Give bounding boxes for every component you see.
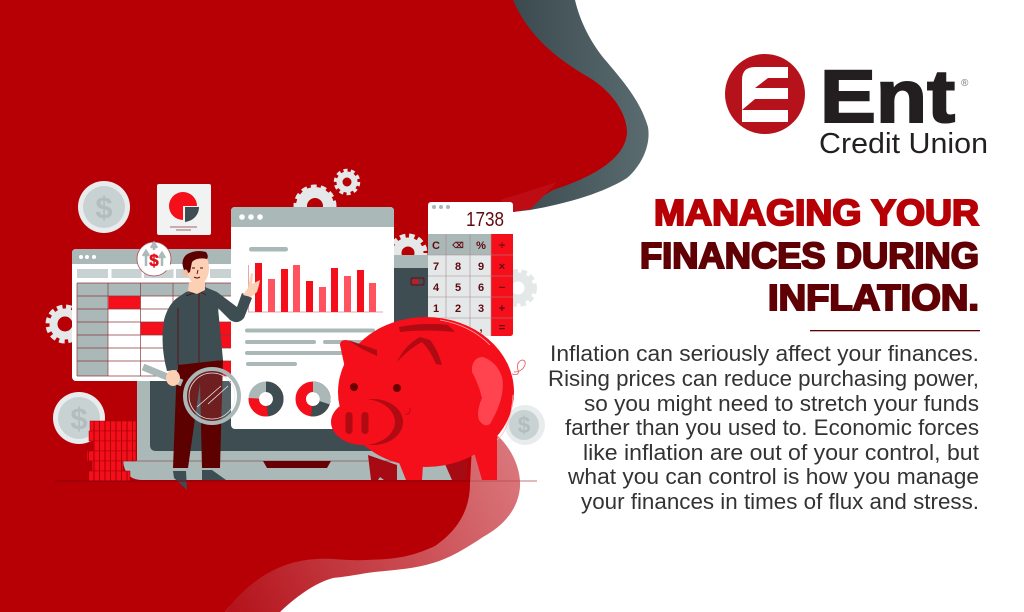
spreadsheet window xyxy=(72,249,242,381)
gear: top large xyxy=(296,187,334,225)
coin: lower left xyxy=(53,392,105,444)
pie chart card xyxy=(157,184,211,235)
body text: Inflation can seriously affect your finances. xyxy=(550,341,979,366)
gear: left xyxy=(48,307,82,341)
calculator: C xyxy=(432,240,440,252)
man with magnifying glass xyxy=(143,251,260,490)
coin: right of pig: $ xyxy=(518,412,531,438)
lighter red wedge xyxy=(500,182,557,212)
gear: behind calculator xyxy=(391,236,425,270)
pointing hand xyxy=(243,273,260,297)
title: MANAGING YOUR xyxy=(654,192,979,233)
calculator: 1738 xyxy=(466,209,504,231)
calculator: = xyxy=(499,322,505,334)
dark grey background swoosh xyxy=(513,0,649,212)
body text xyxy=(548,341,979,514)
calculator: 1 xyxy=(433,303,439,315)
donut chart two xyxy=(301,387,325,411)
body text: like inflation are out of your control, but xyxy=(583,440,979,465)
coin slot xyxy=(399,324,455,332)
bar chart xyxy=(248,263,383,312)
near legs xyxy=(398,460,423,480)
donut chart one xyxy=(254,387,278,411)
neck and head xyxy=(188,282,205,294)
ground line xyxy=(55,480,537,482)
body text: farther than you used to. Economic forces xyxy=(565,415,979,440)
trousers xyxy=(173,360,223,468)
calculator xyxy=(428,202,513,336)
left ear xyxy=(340,340,377,368)
translucent red lower swoosh xyxy=(225,435,520,612)
body text: what you can control is how you manage xyxy=(567,464,979,489)
right ear xyxy=(397,337,442,365)
snout xyxy=(343,399,403,445)
speech bubble with dollar xyxy=(137,242,173,276)
calculator: × xyxy=(499,261,505,273)
coin: top left: $ xyxy=(95,190,113,225)
logo: Ent Credit Union: ® xyxy=(961,78,969,89)
calculator: 6 xyxy=(478,282,484,294)
coin: top left xyxy=(78,181,130,233)
calculator: 2 xyxy=(455,303,461,315)
calculator: + xyxy=(499,303,505,315)
magnifying glass xyxy=(143,367,182,383)
calculator: 8 xyxy=(455,261,461,273)
calculator: 9 xyxy=(478,261,484,273)
body text: Rising prices can reduce purchasing power, xyxy=(548,366,979,391)
far legs xyxy=(368,455,397,480)
piggy bank xyxy=(331,317,525,480)
logo: Ent Credit Union: Credit Union xyxy=(819,128,988,160)
calculator: ⌫ xyxy=(451,241,464,250)
wordmark: Ent xyxy=(820,55,955,138)
highlight xyxy=(472,357,503,425)
shirt xyxy=(163,287,252,371)
logo: Ent Credit Union xyxy=(725,54,988,160)
speech bubble with dollar: $ xyxy=(149,251,159,270)
gear: right of calculator xyxy=(502,272,534,304)
calculator: − xyxy=(499,282,505,294)
stack of red coins xyxy=(87,421,136,481)
calculator: , xyxy=(479,322,483,334)
divider xyxy=(810,330,980,331)
calculator: 4 xyxy=(433,282,440,294)
red background shape xyxy=(0,0,627,612)
title: INFLATION. xyxy=(768,277,979,318)
calculator: 5 xyxy=(455,282,461,294)
main chart window xyxy=(231,207,394,429)
tail xyxy=(512,360,525,374)
body text: so you might need to stretch your funds xyxy=(584,391,979,416)
gear: top small xyxy=(336,170,358,194)
calculator: 7 xyxy=(433,261,439,273)
logo emblem xyxy=(725,54,805,134)
calculator: ÷ xyxy=(499,240,505,252)
title xyxy=(640,192,979,318)
body text: your finances in times of flux and stress. xyxy=(581,489,979,514)
coin: right of pig xyxy=(505,405,545,445)
laptop xyxy=(123,255,460,480)
shoes xyxy=(173,470,226,490)
body xyxy=(338,317,514,467)
coin: lower left: $ xyxy=(70,401,88,436)
eyes xyxy=(350,383,358,391)
calculator: % xyxy=(476,240,486,252)
title: FINANCES DURING xyxy=(640,235,979,276)
calculator: 3 xyxy=(478,303,484,315)
